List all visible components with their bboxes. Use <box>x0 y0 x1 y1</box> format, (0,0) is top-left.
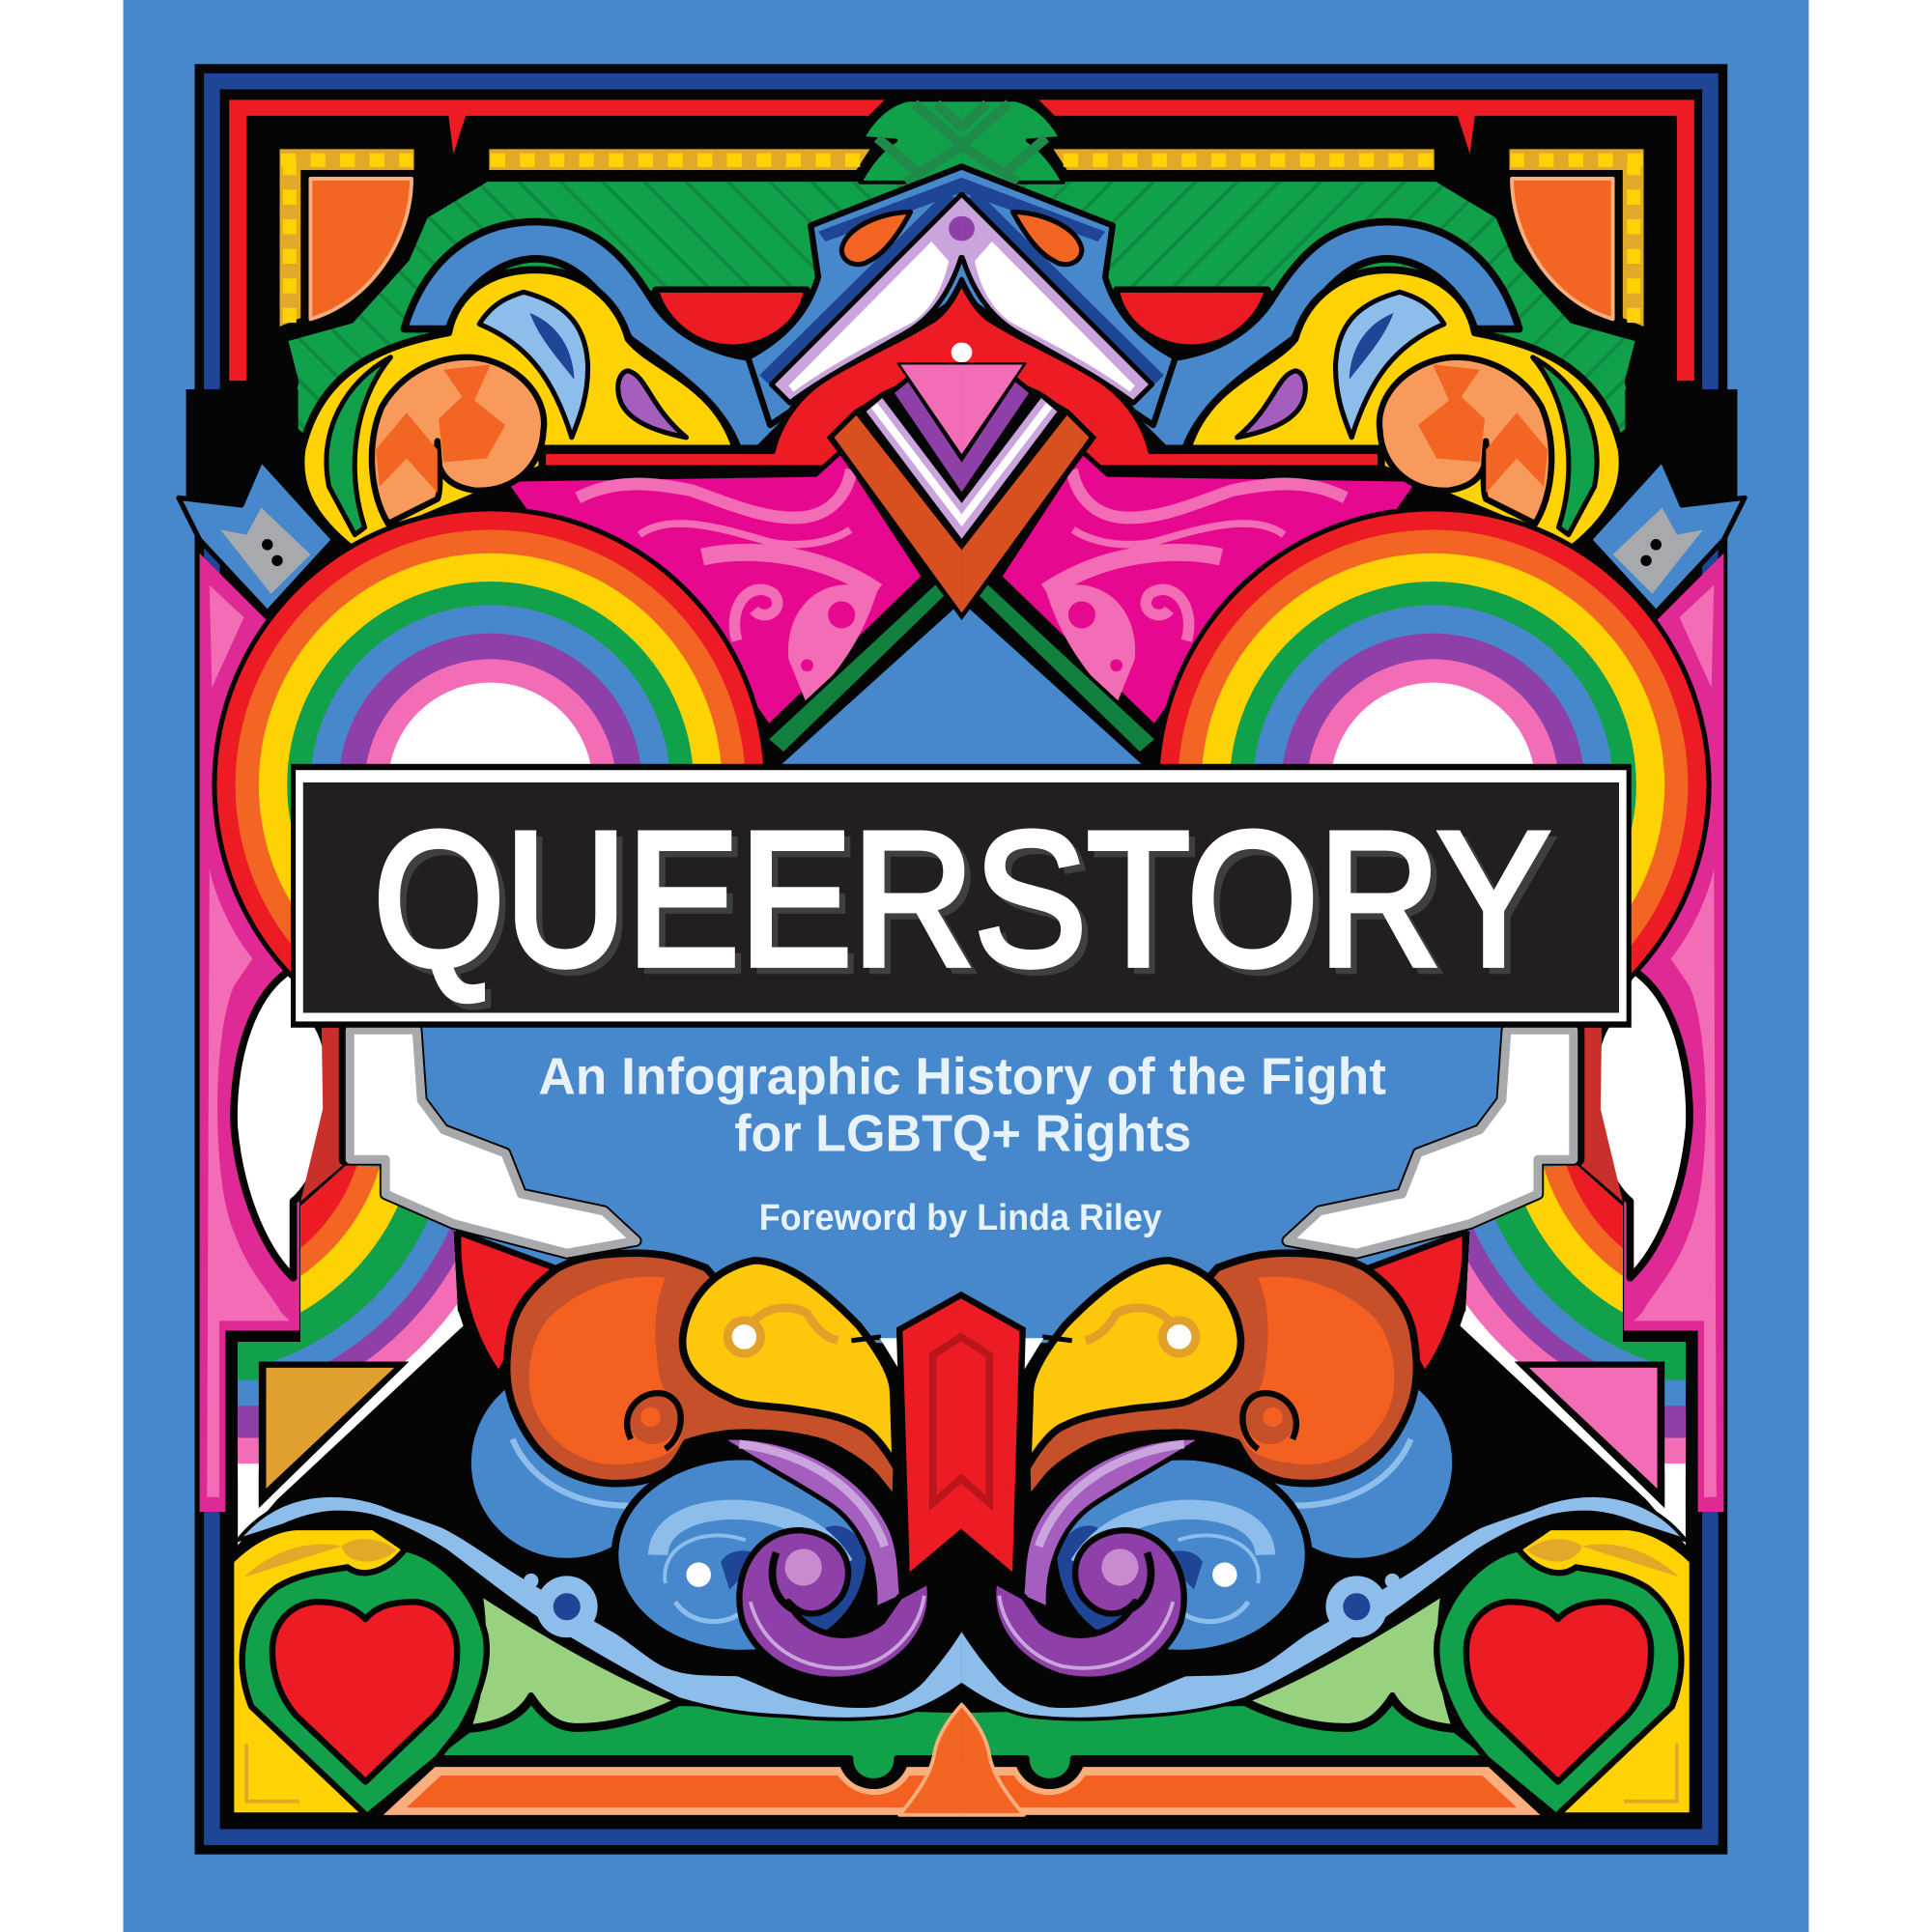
light green leaf <box>469 1592 679 1727</box>
outer frame <box>195 64 1727 1855</box>
green band <box>431 1700 974 1781</box>
pink side column <box>200 554 299 1512</box>
foreword credit: Foreword by Linda Riley <box>759 1197 1162 1238</box>
centre blue panel <box>350 1016 974 1368</box>
pale blue leaf <box>479 292 588 438</box>
right half of ornament <box>938 99 1932 1816</box>
green diagonal strip <box>766 579 952 754</box>
red corner line <box>229 99 885 381</box>
red heart <box>272 1602 457 1781</box>
white diagonal stripe <box>238 1311 464 1545</box>
centre red ribbon <box>899 1295 1023 1578</box>
yellow cloud <box>301 270 735 549</box>
subtitle: An Infographic History of the Fight <box>538 1049 1386 1106</box>
open book shape <box>771 195 985 403</box>
subtitle: for LGBTQ+ Rights <box>734 1105 1191 1162</box>
chevron stack <box>827 343 974 621</box>
red semicircle <box>656 290 807 348</box>
purple teardrop <box>618 371 686 438</box>
blue crown tab with grey plate <box>179 460 334 612</box>
orange centre ornament <box>899 1704 974 1815</box>
orange scroll <box>507 1253 898 1502</box>
right pink triangle <box>1529 1368 1658 1489</box>
magenta panel with swirls <box>502 451 924 727</box>
lower small rainbow <box>0 702 591 1516</box>
orange shrimp swirl <box>372 357 544 524</box>
orange teardrop <box>841 212 911 265</box>
lower black field <box>875 1343 1047 1368</box>
yellow bird scroll <box>683 1261 899 1466</box>
big rainbow <box>212 506 769 1064</box>
gold triangle <box>259 1361 409 1508</box>
purple spiral <box>720 1437 930 1680</box>
second blue scroll <box>614 1457 868 1654</box>
left rainbow strip <box>238 1342 264 1463</box>
blue scroll <box>469 1364 666 1561</box>
green heart surround <box>242 1548 487 1816</box>
title text: QUEERSTORY <box>373 792 1550 1006</box>
white stepped frame <box>345 1030 636 1253</box>
small red strip <box>300 1028 345 1202</box>
blue dot ornament <box>524 1574 598 1637</box>
title banner <box>291 764 1632 1028</box>
blue centre crest <box>748 166 985 425</box>
title text: QUEERSTORY <box>380 798 1556 1011</box>
top green leaf <box>860 99 980 183</box>
left half of ornament <box>0 99 985 1816</box>
orange strip <box>384 1767 974 1815</box>
red arch behind chevron <box>511 280 985 469</box>
green hatched field <box>285 179 985 493</box>
yellow dotted border <box>280 149 870 327</box>
orange corner quarter <box>310 179 412 319</box>
red wedge <box>458 1233 554 1375</box>
blue arch <box>404 222 788 448</box>
black corner block <box>186 389 298 500</box>
subtitle <box>538 1049 1386 1162</box>
yellow corner <box>232 1528 412 1815</box>
white moon <box>234 970 331 1278</box>
green crescent <box>327 357 390 535</box>
pale blue wave <box>238 1495 985 1719</box>
blue triangle <box>774 601 974 771</box>
